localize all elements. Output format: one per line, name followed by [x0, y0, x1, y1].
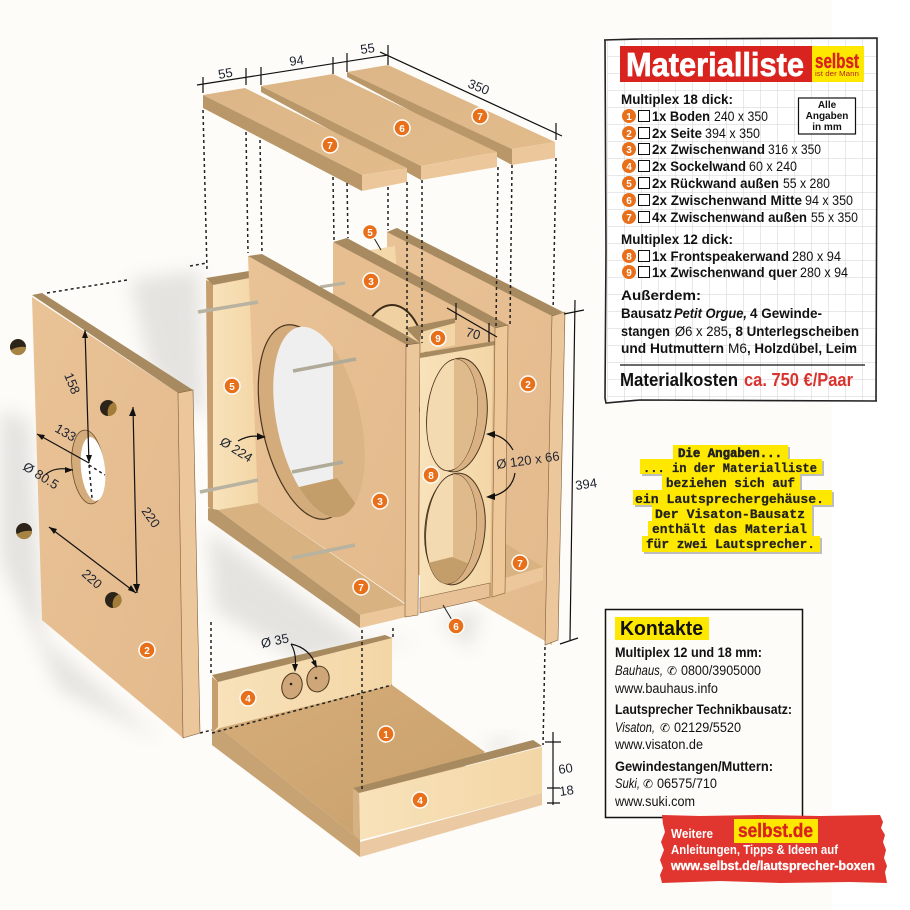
panel: Kontakte	[606, 610, 802, 818]
left side panel 2	[20, 293, 200, 738]
row 4: 2x Sockelwand	[652, 158, 746, 174]
text block: extras: Ø6 x 285	[675, 323, 728, 339]
yellow strips	[633, 445, 832, 552]
row 7: 7	[626, 213, 632, 224]
row 9: 280 x 94	[800, 264, 848, 280]
part number badges on drawing: 3	[368, 277, 374, 288]
right post	[492, 325, 508, 597]
callout shadow	[635, 447, 834, 554]
board 7 right, lower	[505, 543, 543, 593]
soft shadows	[0, 270, 520, 755]
contact: Suki	[614, 759, 773, 809]
bottom board 7	[208, 503, 406, 628]
row 2: 2x Seite	[652, 125, 702, 141]
row 4: 4	[626, 162, 632, 173]
callout text	[635, 446, 824, 552]
note: Alle Angaben in mm: Angaben	[806, 111, 848, 122]
dimension 70	[447, 303, 497, 343]
part number badges on drawing: 2	[144, 646, 150, 657]
contact: Visaton: www.visaton.de	[614, 737, 703, 752]
heading Kontakte: Kontakte	[620, 618, 703, 640]
logo selbst.de: selbst.de	[738, 821, 813, 842]
text block: extras: Petit Orgue,	[674, 305, 747, 321]
row 9: 1x Zwischenwand quer	[652, 264, 798, 280]
dimension 224: Ø 224	[217, 434, 255, 465]
part number badges on drawing: 6	[399, 124, 405, 135]
heading Multiplex 12: Multiplex 12 dick:	[621, 231, 733, 247]
row 1	[622, 108, 768, 124]
material cost: ca. 750 €/Paar	[744, 370, 853, 390]
row 8	[622, 248, 841, 264]
part number badges on drawing: 6	[453, 622, 459, 633]
row 6: 6	[626, 196, 632, 207]
dimension 60 and 18	[545, 732, 575, 805]
part number badges on drawing: 3	[377, 497, 383, 508]
contact: Visaton: Visaton,	[615, 720, 655, 735]
title bar: Materialliste	[626, 46, 804, 83]
callout text: Der Visaton-Bausatz	[655, 507, 805, 522]
part number badges on drawing: 4	[417, 796, 423, 807]
logo selbst	[812, 46, 864, 82]
dimension 60 and 18: 18	[558, 782, 575, 799]
back side panel 2	[387, 228, 565, 645]
contact: Visaton	[614, 702, 792, 752]
contact: Multiplex: Multiplex 12 und 18 mm:	[615, 645, 762, 660]
text block: extras: 4 Gewinde-	[750, 305, 822, 321]
material cost: Materialkosten	[620, 370, 738, 390]
dimension texts: 220	[79, 566, 105, 592]
row 5: 2x Rückwand außen	[652, 175, 779, 191]
contact: Suki: 06575/710	[657, 776, 717, 791]
row 3: 3	[626, 145, 632, 156]
text block: extras: , Holzdübel, Leim	[747, 340, 857, 356]
callout text: enthält das Material	[652, 522, 807, 537]
row 7: 55 x 350	[811, 209, 858, 225]
banner: selbst.de	[660, 815, 887, 883]
row 4	[622, 158, 797, 174]
note: Alle Angaben in mm: in mm	[812, 122, 842, 133]
row 5: 5	[626, 179, 632, 190]
text block: extras	[621, 305, 859, 356]
front panel 3 with round hole	[242, 254, 420, 617]
row 2: 394 x 350	[705, 125, 760, 141]
row 6: 94 x 350	[805, 192, 853, 208]
note: Alle Angaben in mm: Alle	[818, 100, 837, 111]
logo selbst: selbst	[815, 51, 859, 73]
middle panel 3 with stub 5	[320, 238, 508, 560]
dowel holes	[279, 664, 332, 701]
text block: extras: Bausatz	[621, 305, 672, 321]
row 5	[622, 175, 830, 191]
row 4: 60 x 240	[749, 158, 797, 174]
text block: extras: , 8 Unterlegscheiben	[728, 323, 859, 339]
dotted assembly lines, upper	[47, 110, 556, 745]
dimension 35	[260, 630, 317, 672]
board 7 left	[203, 88, 407, 191]
contact: Multiplex: www.bauhaus.info	[614, 681, 718, 696]
row 8: 280 x 94	[792, 248, 841, 264]
dimension 120 x 66: Ø 120 x 66	[495, 448, 560, 472]
banner text: Weitere	[671, 827, 713, 841]
contact: Multiplex: 0800/3905000	[681, 663, 761, 678]
bottom board 6	[420, 583, 490, 613]
part number badges on drawing: 7	[477, 112, 483, 123]
row 3: 316 x 350	[768, 141, 821, 157]
banner text	[670, 827, 875, 873]
callout text: für zwei Lautsprecher.	[646, 537, 815, 552]
callout: Die Angaben	[633, 445, 834, 554]
dotted assembly lines through cabinet	[407, 165, 512, 347]
dimension texts: 133	[52, 421, 79, 444]
part number badges on drawing: 5	[229, 382, 235, 393]
part number badges on drawing: 2	[525, 380, 531, 391]
heading Außerdem: Außerdem:	[621, 287, 701, 303]
part number badges on drawing: 7	[517, 559, 523, 570]
material cost	[620, 370, 853, 390]
banner text: Anleitungen, Tipps & Ideen auf	[671, 843, 839, 857]
row 3: 2x Zwischenwand	[652, 141, 765, 157]
row 7: 4x Zwischenwand außen	[652, 209, 807, 225]
big hole	[258, 324, 364, 520]
dimension texts: 220	[139, 504, 163, 530]
dimension 394: 394	[574, 475, 598, 493]
row 1: 240 x 350	[714, 108, 768, 124]
contact: Visaton: ✆	[660, 721, 670, 735]
upper speaker opening	[426, 358, 488, 472]
panel: Materialliste	[604, 38, 877, 403]
callout text: Die Angaben...	[678, 446, 782, 461]
dimensions upper: 94	[288, 52, 305, 69]
dimensions upper: 350	[466, 76, 492, 98]
banner text: www.selbst.de/lautsprecher-boxen	[670, 859, 875, 873]
dimension texts: 158	[61, 371, 83, 396]
dimensions upper: 55	[359, 40, 376, 57]
part number badges on drawing: 1	[383, 730, 389, 741]
callout text: beziehen sich auf	[666, 476, 795, 491]
contact: Multiplex	[614, 645, 762, 696]
contact: Suki: Suki,	[615, 776, 640, 791]
row 8: 1x Frontspeakerwand	[652, 248, 789, 264]
part number badges on drawing	[139, 108, 536, 808]
dimension 120 x 66	[486, 431, 560, 500]
row 1: 1x Boden	[652, 108, 710, 124]
floor 1	[220, 685, 485, 840]
contact: Suki: Gewindestangen/Muttern:	[615, 759, 773, 774]
part number badges on drawing: 7	[358, 583, 364, 594]
row 3	[622, 141, 821, 157]
part number badges on drawing: 8	[428, 471, 434, 482]
rear panel 5	[206, 270, 258, 512]
row 9	[622, 264, 848, 280]
dimension 60 and 18: 60	[557, 760, 574, 777]
callout text: ... in der Materialliste	[643, 461, 817, 476]
dimension 70: 70	[464, 324, 482, 343]
row 8: 8	[626, 252, 632, 263]
woofer hole	[68, 429, 108, 505]
cap nuts	[10, 339, 122, 608]
top boards	[203, 65, 555, 191]
contact: Visaton: 02129/5520	[674, 720, 741, 735]
dimension 35: Ø 35	[260, 630, 290, 651]
part number badges on drawing: 7	[327, 141, 333, 152]
lower base assembly	[212, 630, 575, 857]
contact: Visaton: Lautsprecher Technikbausatz:	[615, 702, 792, 717]
text block: extras: und Hutmuttern	[621, 340, 724, 356]
row 7	[622, 209, 858, 225]
row 2	[622, 125, 760, 141]
threaded rods	[198, 302, 355, 558]
board 7 right	[347, 65, 555, 165]
row 6: 2x Zwischenwand Mitte	[652, 192, 802, 208]
text block: extras: M6	[728, 340, 747, 356]
board 6	[261, 74, 497, 180]
front speaker wall 8	[420, 341, 495, 598]
dimensions upper: 55	[217, 65, 234, 82]
part number badges on drawing: 4	[245, 694, 251, 705]
lower speaker opening	[424, 472, 486, 586]
contact: Suki: www.suki.com	[614, 794, 695, 809]
logo selbst: ist der Mann	[815, 71, 859, 78]
floor edge	[212, 728, 360, 857]
contact: Multiplex: Bauhaus,	[615, 663, 663, 678]
text block: extras: stangen	[621, 323, 670, 339]
row 9: 9	[626, 268, 632, 279]
part number badges on drawing: 9	[435, 334, 441, 345]
contact: Suki: ✆	[643, 777, 653, 791]
dimension arrows	[37, 330, 140, 593]
dimensions upper	[197, 40, 598, 644]
row 6	[622, 192, 853, 208]
horizontal board 9	[405, 318, 455, 353]
front base wall 4	[353, 740, 542, 857]
part number badges on drawing: 5	[367, 228, 373, 239]
heading Multiplex 18: Multiplex 18 dick:	[621, 91, 733, 107]
row 5: 55 x 280	[783, 175, 830, 191]
callout text: ein Lautsprechergehäuse.	[635, 492, 824, 507]
dimension texts	[20, 371, 163, 592]
row 1: 1	[626, 112, 632, 123]
rear base wall 4	[212, 635, 392, 733]
row 2: 2	[626, 129, 632, 140]
contact: Multiplex: ✆	[667, 664, 677, 678]
dimension texts: Ø 80.5	[20, 459, 61, 492]
dimension 394	[560, 300, 598, 644]
note: Alle Angaben in mm	[798, 98, 856, 134]
